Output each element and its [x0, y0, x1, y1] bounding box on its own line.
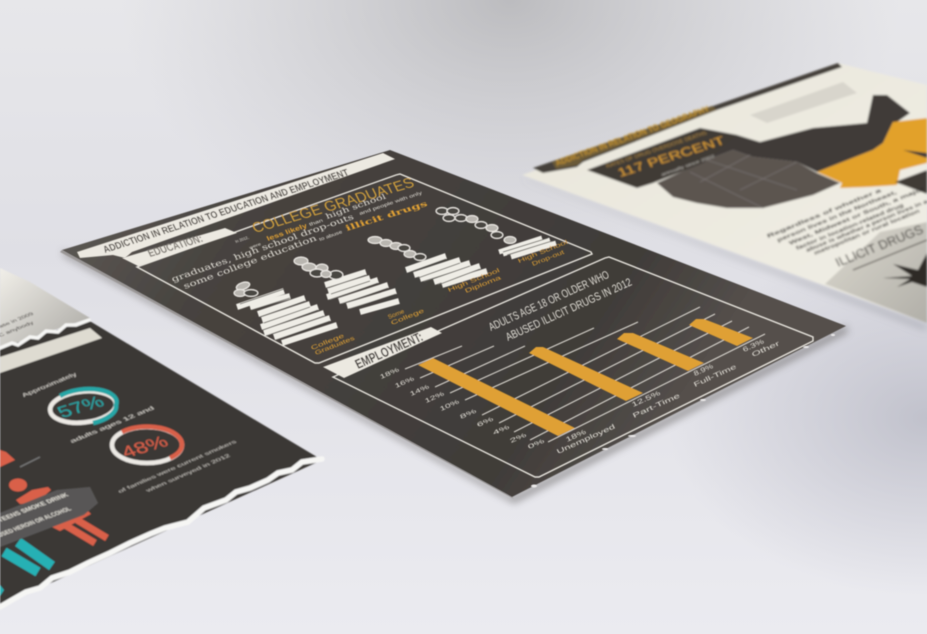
pills: high school diploma [368, 236, 426, 260]
bar labels: Part-Time [631, 391, 681, 419]
label: high school diploma: High School [447, 267, 501, 293]
map of the United States [657, 95, 927, 208]
stack: some college [325, 272, 399, 312]
axis labels: 2% [509, 431, 528, 444]
heading: college graduates: COLLEGE GRADUATES [249, 174, 417, 236]
callout: 117 percent: annually since 2002 [661, 154, 716, 177]
pills: some college [294, 257, 343, 280]
ring chart: 57 percent [49, 388, 117, 426]
axis labels [379, 366, 546, 450]
main heading bar [77, 153, 395, 258]
axis labels: 18% [379, 366, 400, 380]
main heading bar: ADDICTION IN RELATION TO EDUCATION AND EMPLOYMENT [101, 166, 351, 255]
axis labels: 12% [424, 390, 445, 404]
ring chart: 57 percent: 57% [54, 393, 108, 421]
callout: 117 percent: RATES OF DRUG OVERDOSE DEATHS [605, 130, 708, 169]
label: college graduates: College [310, 332, 345, 351]
icon: orange person pictogram [0, 450, 107, 543]
right page header strip: ADDICTION IN RELATION TO GEOGRAPHY [554, 104, 712, 168]
paragraph: geography: factor in location-related drug [795, 203, 905, 251]
bar labels: Unemployed [555, 422, 617, 455]
chart title [487, 269, 634, 344]
education intro text: to abuse [319, 230, 344, 242]
education intro text: than [309, 219, 324, 227]
caption: adults ages 12 and: adults ages 12 and [68, 405, 156, 444]
center page worn bottom edge [531, 334, 835, 488]
stack: high school diploma [406, 256, 487, 285]
education intro text [170, 191, 430, 291]
employment tab [323, 327, 442, 378]
axis labels: 14% [409, 383, 430, 397]
bar: full-time [617, 333, 704, 371]
chart title: ADULTS AGE 18 OR OLDER WHO [487, 269, 611, 334]
callout: grey banner [0, 487, 98, 547]
label: high school diploma: Diploma [464, 274, 503, 294]
axis labels: 10% [439, 398, 460, 412]
bar: part-time [529, 347, 643, 401]
education intro text: some college education [182, 234, 319, 291]
right page paper [522, 63, 927, 323]
bar labels: 8.9% [692, 362, 715, 377]
education intro text: and people with only [359, 191, 423, 216]
education intro text: In 2012, [235, 236, 250, 244]
paragraph: geography: person lives in the Northeast, [776, 190, 898, 243]
label: high school drop-out: High School [517, 238, 569, 264]
left page torn edge [0, 320, 322, 607]
label: college graduates: Graduates [314, 334, 356, 356]
stack: drop-out [499, 238, 556, 257]
education intro text: were [249, 242, 262, 250]
stack: college graduates [237, 289, 337, 343]
education intro text: less likely [265, 221, 309, 242]
bar labels: Other [750, 339, 781, 358]
callout: right map box [895, 170, 927, 194]
panel: left page, usage rates [0, 268, 322, 607]
label: some college: Some [387, 308, 406, 320]
employment tab label: EMPLOYMENT: [352, 329, 425, 372]
label: some college: College [390, 307, 425, 326]
education intro text: graduates, high school drop-outs [170, 213, 355, 284]
axis labels: 4% [492, 423, 511, 436]
axis labels: 6% [476, 415, 495, 428]
pills: drop-out [436, 208, 516, 244]
bar labels [555, 337, 781, 455]
ring chart: 48 percent [112, 427, 182, 463]
icon: cannabis leaf [883, 253, 927, 287]
icon: teal person legs [0, 542, 52, 596]
bar labels: Full-Time [692, 362, 738, 388]
axis labels: 0% [527, 437, 546, 450]
callout: 117 percent [587, 128, 737, 188]
bar: unemployed [418, 358, 575, 436]
axis labels: 16% [394, 375, 415, 389]
ring chart: 48 percent: 48% [118, 433, 172, 461]
caption: 48 percent: of families were current smokers [117, 439, 239, 494]
grid lines [405, 307, 765, 442]
left page dark body [0, 320, 322, 606]
paragraph: geography: Regardless of whether a [766, 188, 882, 239]
divider caption [20, 457, 40, 467]
label: high school drop-out: Drop-out [531, 248, 566, 267]
bar: other [689, 319, 753, 346]
chart title: ABUSED ILLICIT DRUGS IN 2012 [504, 276, 634, 344]
paragraph: geography: West, Midwest or South, a major [788, 186, 926, 246]
bar labels: 12.5% [630, 389, 662, 408]
left page heading bar [0, 328, 102, 373]
label: approximately: Approximately [20, 371, 79, 398]
education tab [122, 228, 237, 266]
education intro text: illicit drugs [344, 199, 430, 233]
panel: employment [323, 257, 813, 477]
education intro text: high school [324, 193, 388, 221]
bar chart: employment status [379, 307, 781, 455]
callout: 117 percent: 117 PERCENT [615, 134, 727, 180]
center page edge [60, 250, 514, 499]
center page body [62, 150, 846, 497]
panel: center page, education and employment [60, 150, 848, 503]
caption: 48 percent: when surveyed in 2012 [144, 453, 232, 494]
paragraph: geography [766, 186, 927, 256]
panel: right page, geographic addiction [522, 63, 927, 330]
left page cream top [0, 268, 90, 348]
pills: college graduates [234, 281, 258, 296]
bar labels: 18% [564, 427, 588, 443]
education tab label: EDUCATION: [146, 233, 205, 260]
paragraph: geography: metropolitan or rural location [813, 209, 921, 256]
grey note block [750, 82, 857, 123]
right page corner shade [825, 222, 927, 323]
bar labels: 6.3% [741, 337, 765, 353]
axis labels: 8% [459, 407, 478, 420]
panel: education [122, 174, 592, 363]
